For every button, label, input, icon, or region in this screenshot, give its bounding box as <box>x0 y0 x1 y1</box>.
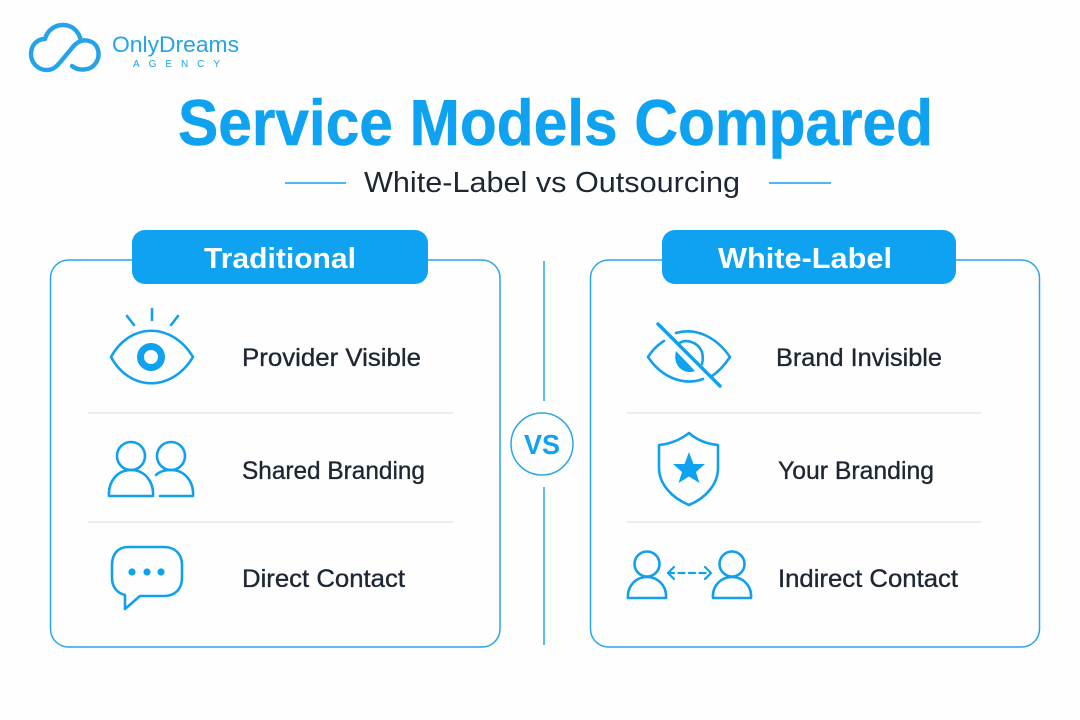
icon: two people with dashed arrow <box>628 552 751 598</box>
label: provider visible: Provider Visible <box>242 344 421 372</box>
heading: white-label: White-Label <box>718 243 892 275</box>
heading: traditional: Traditional <box>204 243 356 275</box>
label: brand invisible: Brand Invisible <box>776 344 942 372</box>
label: your branding: Your Branding <box>778 457 934 485</box>
icon: two people <box>109 442 193 496</box>
icon: crossed-out eye <box>648 324 730 386</box>
title: Service Models Compared <box>178 86 933 159</box>
vs divider: VS <box>524 429 560 460</box>
icon: speech bubble <box>112 547 182 609</box>
label: direct contact: Direct Contact <box>242 565 405 593</box>
label: shared branding: Shared Branding <box>242 457 425 485</box>
panel: white-label <box>590 230 1040 647</box>
icon: eye with rays <box>111 309 193 383</box>
logo wordmark: OnlyDreams <box>112 32 239 57</box>
vs divider <box>511 261 573 645</box>
logo <box>31 25 239 70</box>
heading: traditional <box>132 230 428 284</box>
heading: white-label <box>662 230 956 284</box>
logo tagline: AGENCY <box>133 59 220 70</box>
icon: shield with star <box>659 433 718 505</box>
icon: cloud logo <box>31 25 99 70</box>
subtitle: White-Label vs Outsourcing <box>364 167 740 199</box>
panel: traditional <box>50 230 500 647</box>
label: indirect contact: Indirect Contact <box>778 565 958 593</box>
